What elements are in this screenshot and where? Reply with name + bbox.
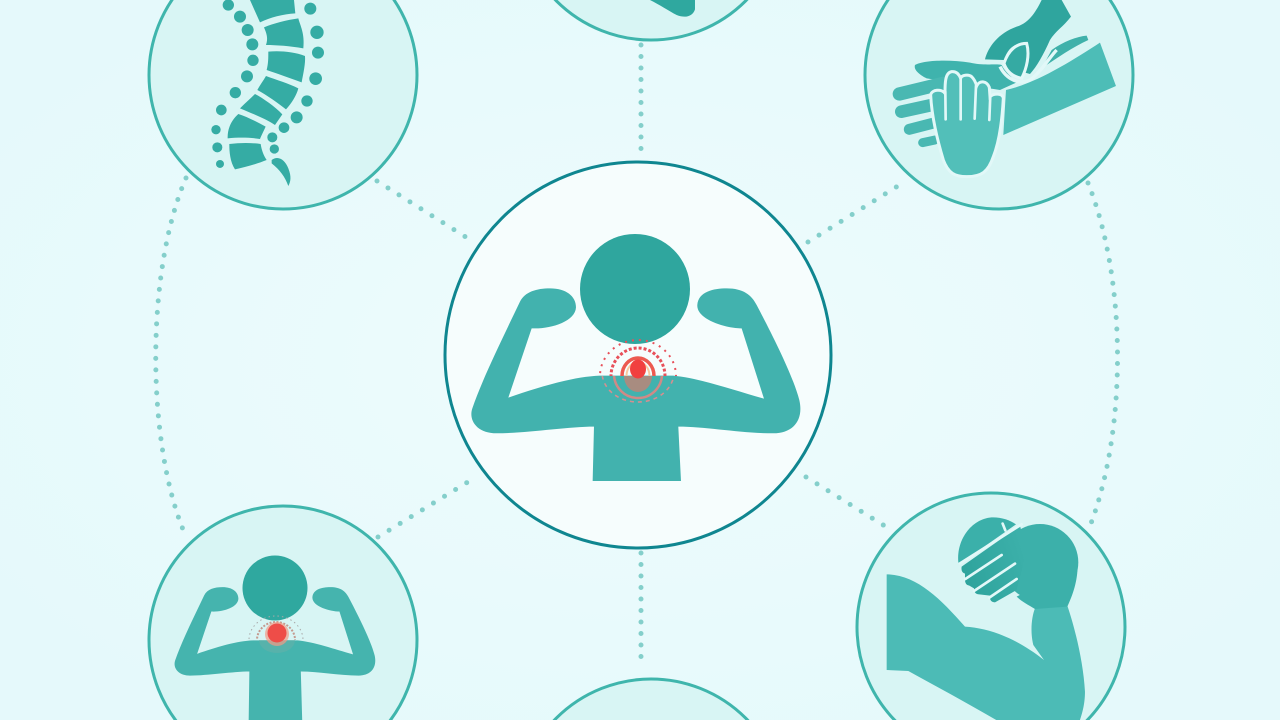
icon: hands on forearm <box>899 0 1116 177</box>
icon: foot fragment <box>650 0 695 17</box>
icon: spine <box>211 0 324 186</box>
panel: neck pain figure small circle <box>149 506 417 720</box>
icon: person holding head <box>887 517 1085 720</box>
panel: massage hands circle <box>865 0 1133 209</box>
icon: central figure body <box>471 288 800 481</box>
panel: spine circle <box>149 0 417 209</box>
panel: top-centre circle <box>517 0 785 40</box>
panel: bottom-centre circle <box>517 679 785 720</box>
infographic canvas <box>148 0 1134 720</box>
icon: small figure head <box>242 556 308 620</box>
icon: pain marker <box>600 340 676 412</box>
panel: head and arm circle <box>857 493 1125 720</box>
icon: small figure body <box>175 587 375 720</box>
panel: central figure circle <box>445 162 831 548</box>
icon: central figure head <box>580 234 690 344</box>
dotted connectors <box>156 45 1118 668</box>
icon: small pain marker <box>248 616 304 653</box>
